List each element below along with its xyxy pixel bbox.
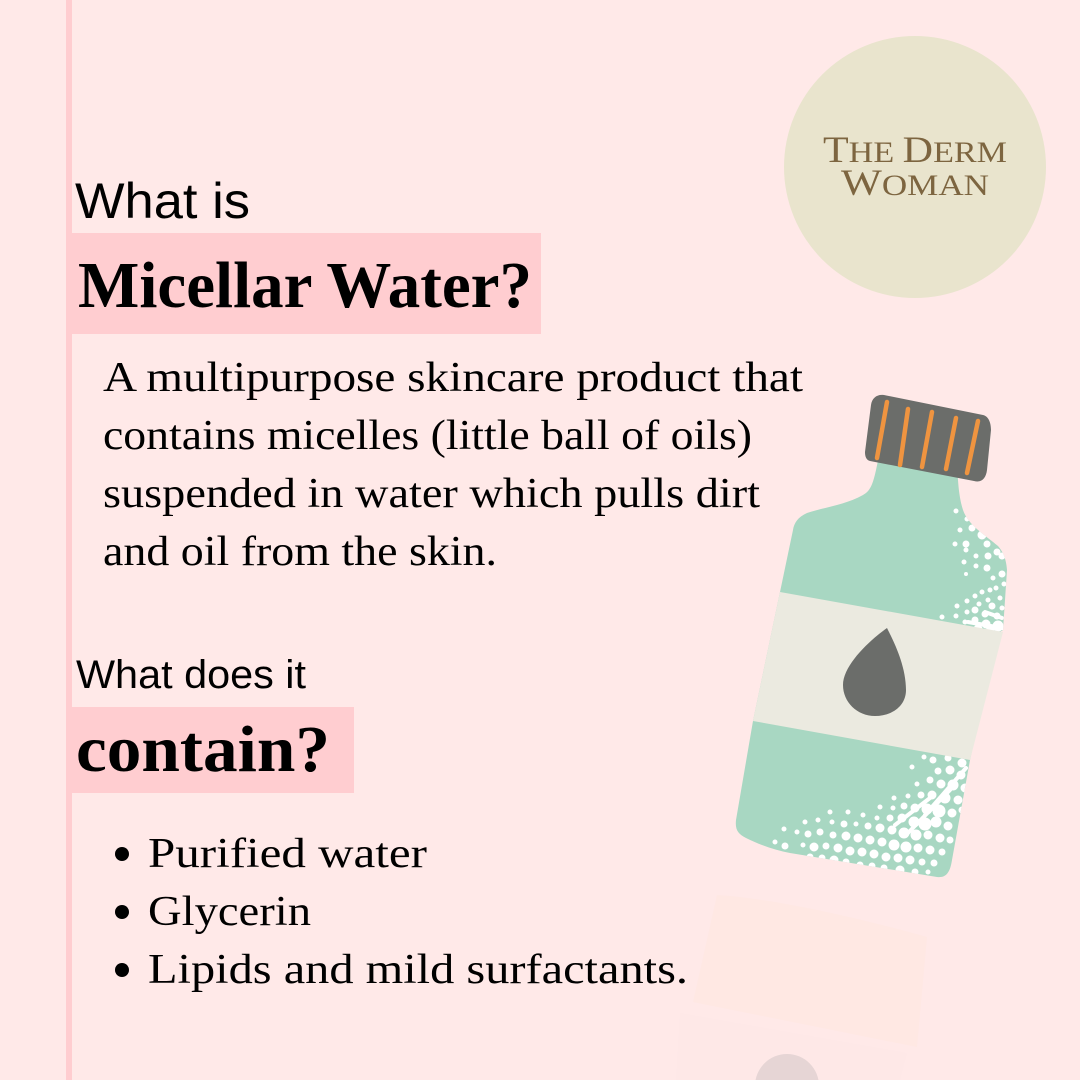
ingredient list: [115, 831, 688, 993]
ingredient list: Lipids and mild surfactants.: [148, 947, 688, 993]
definition paragraph: suspended in water which pulls dirt: [103, 471, 760, 517]
ingredient list: Glycerin: [148, 889, 311, 935]
water drop: [843, 628, 906, 716]
bottle body: [736, 450, 1007, 877]
definition paragraph: and oil from the skin.: [103, 529, 497, 575]
cap stripes: [877, 402, 978, 473]
definition paragraph: contains micelles (little ball of oils): [103, 413, 752, 459]
heading: What is: What is: [75, 173, 250, 229]
ingredient list: Purified water: [148, 831, 427, 877]
logo badge: [784, 36, 1046, 298]
heading: Micellar Water?: Micellar Water?: [78, 249, 532, 322]
definition paragraph: [103, 355, 803, 575]
definition paragraph: A multipurpose skincare product that: [103, 355, 803, 401]
faded bottle reflection: [676, 895, 927, 1080]
heading: What does it: What does it: [76, 653, 306, 697]
bottle cap: [865, 395, 991, 481]
illustration: bottle: [736, 395, 1007, 877]
left accent bar: [66, 0, 72, 1080]
speckle texture: [773, 509, 1006, 875]
label band: [753, 592, 1003, 760]
logo badge: WOMAN: [841, 163, 989, 204]
logo badge: THE DERM: [823, 130, 1007, 171]
heading: contain?: contain?: [76, 713, 330, 786]
